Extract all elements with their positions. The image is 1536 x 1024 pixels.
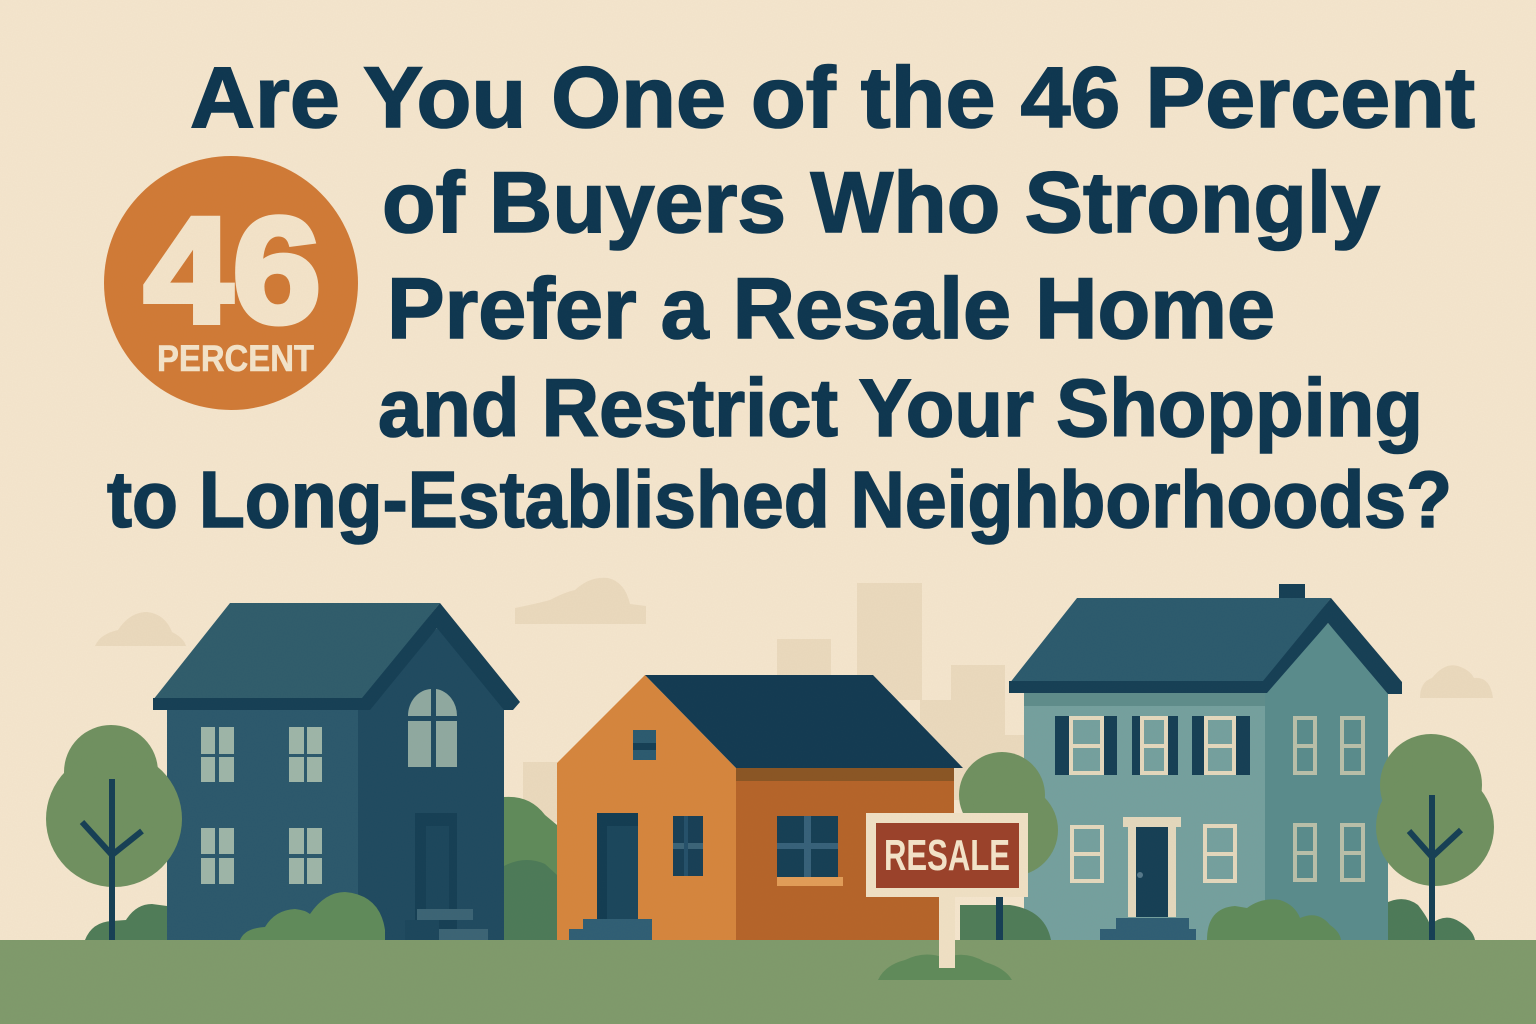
side window xyxy=(673,816,703,876)
title: of Buyers Who Strongly xyxy=(382,155,1380,251)
badge: 46 percent: PERCENT xyxy=(157,338,314,379)
title xyxy=(107,50,1475,544)
front window xyxy=(777,816,843,886)
resale sign xyxy=(866,813,1028,968)
side windows xyxy=(1295,718,1363,880)
house: teal right xyxy=(1009,584,1402,940)
ground xyxy=(0,940,1536,1024)
entry steps xyxy=(1100,918,1196,940)
bush: front of left house xyxy=(240,892,385,940)
door xyxy=(597,813,638,919)
title: and Restrict Your Shopping xyxy=(378,363,1423,454)
house: dark blue left xyxy=(153,603,520,940)
tree: left xyxy=(46,725,182,940)
bush: front of right house xyxy=(1207,899,1341,940)
badge: 46 percent: 46 xyxy=(144,186,321,354)
windows: upper left xyxy=(201,727,322,884)
chimney xyxy=(1279,584,1305,599)
badge: 46 percent xyxy=(104,156,358,410)
tree: right xyxy=(1376,734,1494,940)
tree: behind sign xyxy=(959,752,1058,940)
cream windows xyxy=(1071,718,1235,881)
arched window xyxy=(408,689,457,767)
resale sign: RESALE xyxy=(884,831,1010,880)
entry door xyxy=(1123,817,1181,917)
background clouds and skyline xyxy=(95,578,1493,822)
attic window xyxy=(633,730,656,760)
title: Are You One of the 46 Percent xyxy=(190,50,1475,146)
title: to Long-Established Neighborhoods? xyxy=(107,455,1452,544)
shutters xyxy=(1055,716,1250,775)
steps xyxy=(569,919,652,940)
bush: under sign xyxy=(878,954,1012,980)
door xyxy=(405,813,488,940)
back bushes xyxy=(85,797,1475,940)
title: Prefer a Resale Home xyxy=(387,261,1275,357)
house: orange centre xyxy=(557,675,963,940)
